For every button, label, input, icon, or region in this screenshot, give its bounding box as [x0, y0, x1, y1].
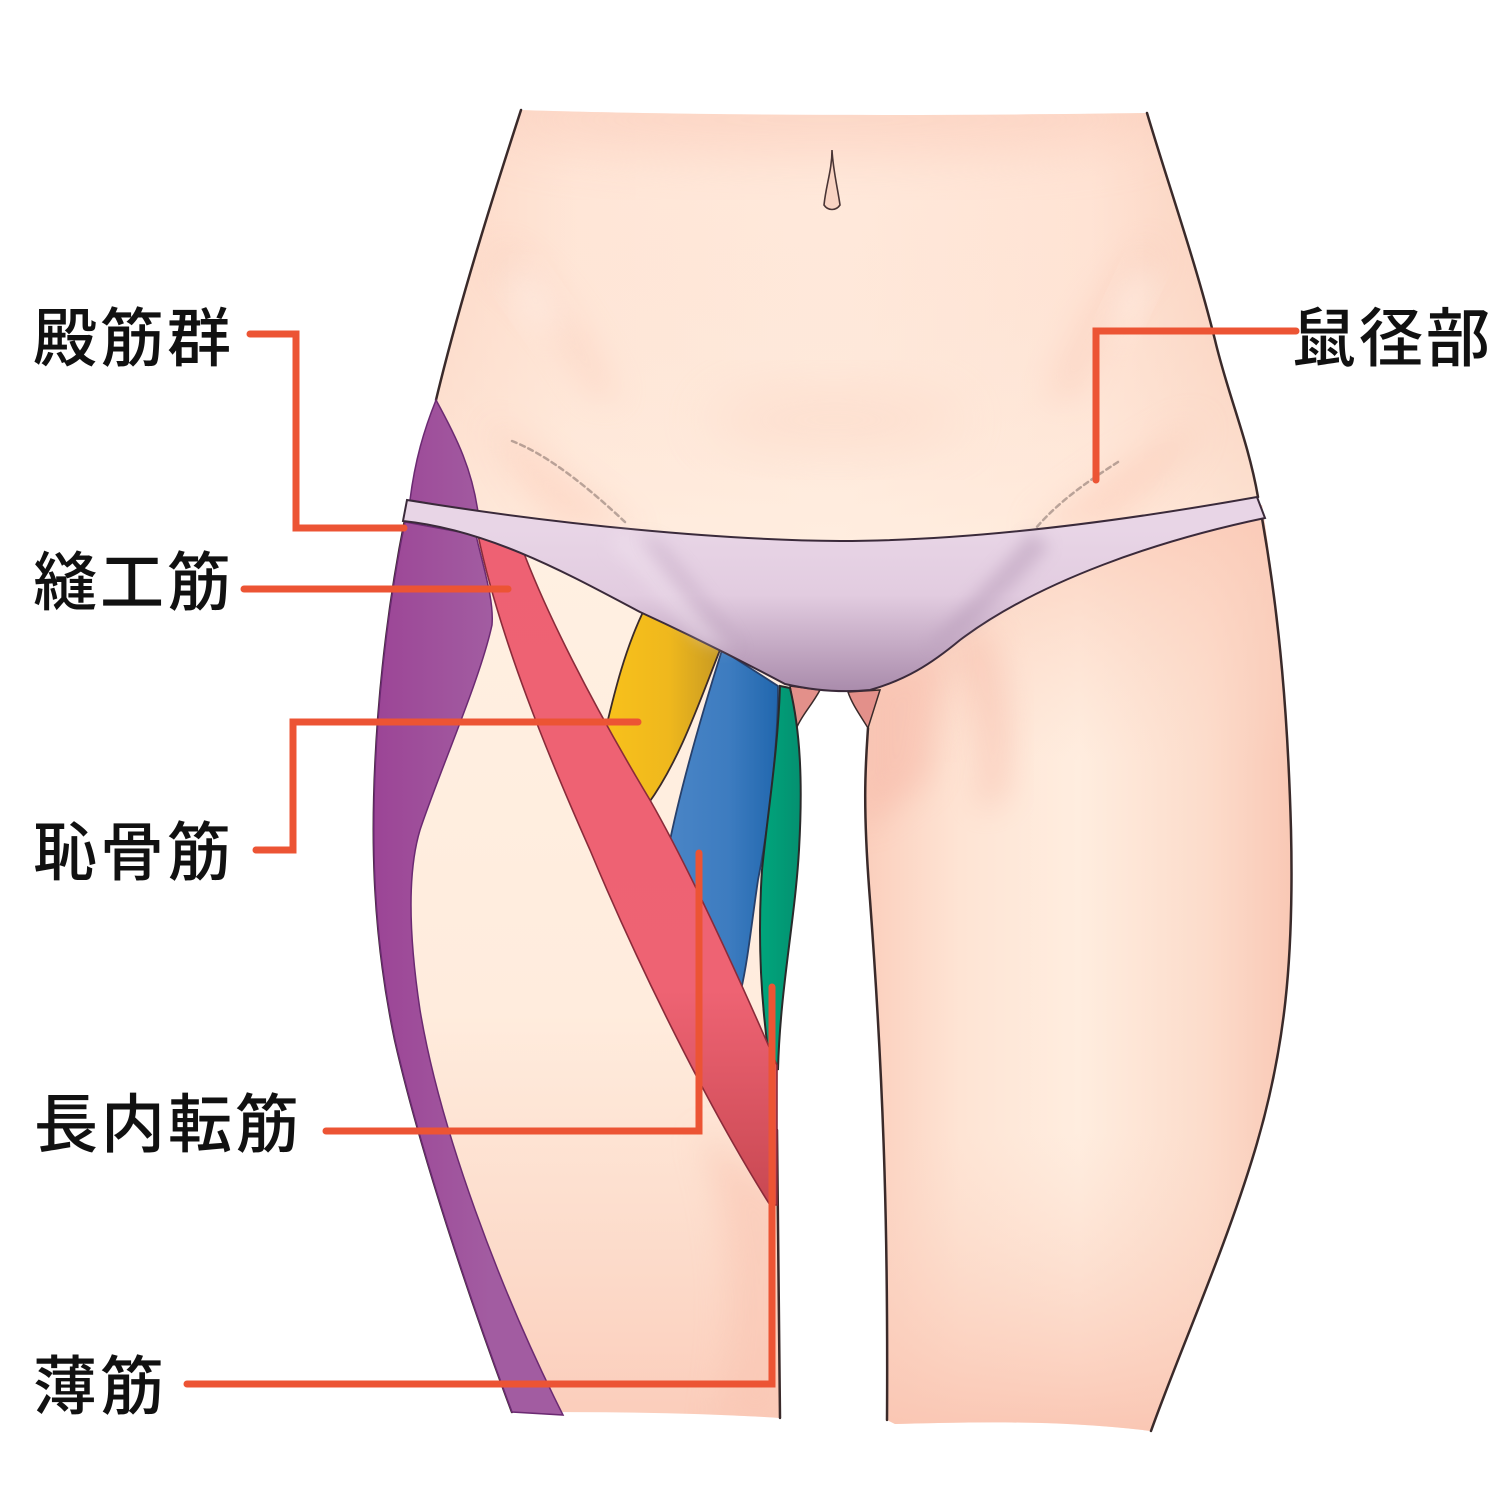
muscle: gracilis (green)	[760, 686, 801, 1070]
leader line: gracilis	[187, 987, 772, 1384]
muscle: adductor longus (blue)	[668, 650, 778, 990]
leader line: gluteal group	[250, 334, 404, 528]
label: sartorius: 縫工筋	[33, 547, 234, 619]
navel	[824, 150, 840, 210]
label: pectineus: 恥骨筋	[33, 817, 234, 889]
leader line: sartorius	[244, 586, 508, 592]
leader line: pectineus	[256, 722, 638, 850]
muscle: sartorius (pink)	[478, 535, 777, 1205]
torso	[434, 108, 1260, 540]
underwear	[403, 497, 1265, 691]
left leg	[374, 515, 820, 1430]
leader line: adductor longus	[326, 853, 699, 1131]
label: adductor longus: 長内転筋	[34, 1089, 302, 1161]
muscle: pectineus (yellow)	[606, 612, 720, 804]
label: gracilis: 薄筋	[33, 1351, 167, 1423]
muscle: gluteal group (purple)	[374, 400, 563, 1415]
label: inguinal region: 鼠径部	[1292, 303, 1493, 375]
groin creases	[512, 441, 1118, 528]
skin shadow near knee	[710, 1151, 778, 1418]
right leg	[848, 505, 1292, 1431]
leader line: inguinal region	[1096, 331, 1296, 480]
label: gluteal group: 殿筋群	[33, 303, 234, 375]
